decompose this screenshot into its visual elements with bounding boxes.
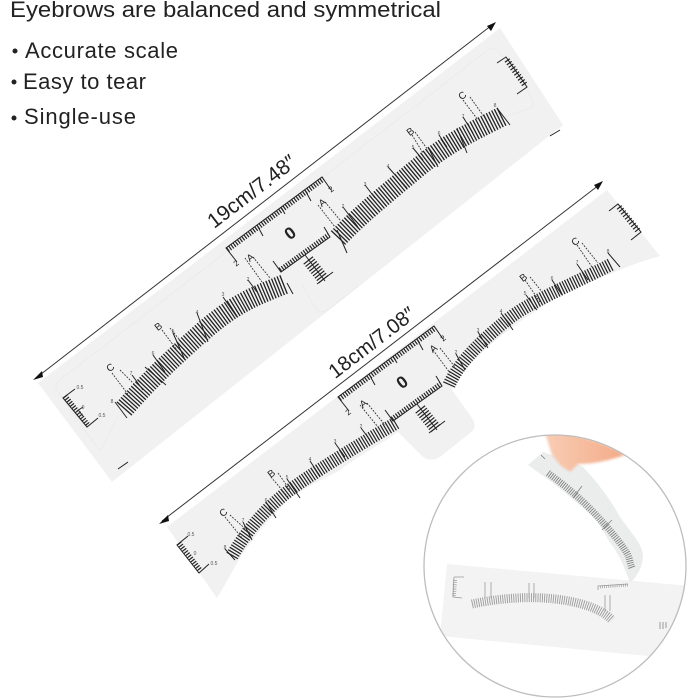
markers A B C and numerals: C xyxy=(457,90,469,103)
markers A B C and numerals: B xyxy=(405,126,417,139)
markers A B C and numerals: 4 xyxy=(500,309,503,315)
markers A B C and numerals: A xyxy=(428,343,440,356)
bullet: easy to tear: Easy to tear xyxy=(23,69,146,94)
centre scale: 0 xyxy=(393,372,412,393)
ruler sticker: 18cm xyxy=(167,190,660,598)
markers A B C and numerals: 2 xyxy=(455,350,458,356)
left eyebrow ticks xyxy=(225,423,396,560)
markers A B C and numerals: 8 xyxy=(607,249,610,255)
flat ruler strip xyxy=(440,564,690,660)
left scale: 0.5 xyxy=(77,385,84,391)
centre scale: 2 xyxy=(344,407,353,417)
markers A B C and numerals: 7 xyxy=(462,114,465,120)
centre scale xyxy=(226,177,336,284)
lifted strip markings xyxy=(541,455,632,568)
markers A B C and numerals: 6 xyxy=(551,276,554,282)
markers A B C and numerals: 6 xyxy=(438,131,441,137)
dimension label: 18cm: 18cm/7.08″ xyxy=(324,302,420,383)
markers A B C and numerals: A xyxy=(245,252,257,265)
centre scale: 2 xyxy=(439,333,448,343)
markers A B C and numerals: 3 xyxy=(364,182,367,188)
markers A B C and numerals: 2 xyxy=(342,204,345,210)
flat strip markings xyxy=(453,577,666,629)
markers A B C and numerals: A xyxy=(358,398,370,411)
fingers xyxy=(545,433,625,472)
markers A B C and numerals: 4 xyxy=(196,310,199,316)
markers A B C and numerals xyxy=(105,90,497,405)
ruler sticker: 19cm xyxy=(38,28,563,482)
ruler backing xyxy=(167,190,660,598)
left eyebrow ticks xyxy=(115,280,293,418)
faint die-cut outline xyxy=(56,49,533,450)
tear mark left xyxy=(118,462,128,469)
markers A B C and numerals: 6 xyxy=(152,351,155,357)
left scale: 0 xyxy=(194,551,197,557)
markers A B C and numerals: 5 xyxy=(172,329,175,335)
bullet: single-use: Single-use xyxy=(24,104,136,129)
markers A B C and numerals: 3 xyxy=(477,328,480,334)
markers A B C and numerals: 8 xyxy=(494,103,497,109)
markers A B C and numerals: 8 xyxy=(111,399,114,405)
markers A B C and numerals: A xyxy=(317,197,329,210)
markers A B C and numerals: C xyxy=(105,362,117,375)
markers A B C and numerals: 5 xyxy=(412,145,415,151)
left scale xyxy=(63,385,106,427)
left scale: 0.5 xyxy=(99,413,106,419)
tear mark right xyxy=(550,130,560,136)
bullet: accurate scale: Accurate scale xyxy=(25,38,178,63)
right scale xyxy=(497,57,527,94)
circular inset: peeling a ruler xyxy=(424,433,690,697)
markers A B C and numerals: C xyxy=(218,507,230,520)
markers A B C and numerals: 2 xyxy=(360,424,363,430)
markers A B C and numerals: C xyxy=(570,236,582,249)
markers A B C and numerals: 4 xyxy=(309,457,312,463)
markers A B C and numerals: 8 xyxy=(224,545,227,551)
markers A B C and numerals: 5 xyxy=(286,475,289,481)
markers A B C and numerals xyxy=(218,236,610,551)
inset circle border xyxy=(424,435,686,697)
markers A B C and numerals: 7 xyxy=(576,260,579,266)
ruler backing xyxy=(38,28,563,482)
markers A B C and numerals: 7 xyxy=(242,518,245,524)
markers A B C and numerals: 7 xyxy=(130,371,133,377)
markers A B C and numerals: 6 xyxy=(265,498,268,504)
centre scale: 0 xyxy=(281,223,300,244)
dimension label: 19cm: 19cm/7.48″ xyxy=(203,150,301,233)
dimension arrow: 18cm xyxy=(159,181,603,524)
feature list xyxy=(12,38,178,129)
left scale xyxy=(177,532,218,573)
lifted ruler strip xyxy=(528,452,643,583)
right scale xyxy=(609,204,641,240)
markers A B C and numerals: 3 xyxy=(222,292,225,298)
markers A B C and numerals: 2 xyxy=(247,277,250,283)
right eyebrow ticks xyxy=(449,253,620,385)
centre scale: 2 xyxy=(327,184,336,194)
centre scale: 2 xyxy=(232,258,241,268)
markers A B C and numerals: B xyxy=(266,468,278,481)
dimension arrow: 19cm xyxy=(33,22,496,380)
centre scale xyxy=(338,326,448,433)
markers A B C and numerals: 5 xyxy=(524,291,527,297)
markers A B C and numerals: 3 xyxy=(334,439,337,445)
left scale: 0.5 xyxy=(211,561,218,567)
left scale: 0 xyxy=(82,405,85,411)
left scale: 0.5 xyxy=(188,532,195,538)
markers A B C and numerals: B xyxy=(518,272,530,285)
markers A B C and numerals: B xyxy=(153,321,165,334)
right eyebrow ticks xyxy=(337,108,510,253)
markers A B C and numerals: 4 xyxy=(387,164,390,170)
